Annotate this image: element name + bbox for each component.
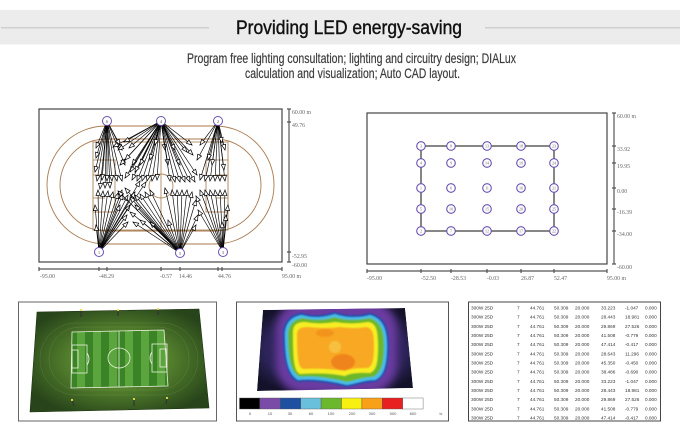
table rows: 300W 25D bbox=[471, 379, 494, 384]
table rows: 7 bbox=[517, 351, 520, 356]
grid outline bbox=[421, 146, 554, 231]
table rows: 50.309 bbox=[554, 351, 569, 356]
luminaire numbers: 11 bbox=[485, 186, 489, 190]
table rows: 0.000 bbox=[645, 388, 657, 393]
subtitle text: Program free lighting consultation; lighting and circuitry design; DIALux bbox=[187, 50, 516, 66]
table rows: 44.761 bbox=[530, 406, 545, 411]
track lines bbox=[40, 323, 198, 395]
table rows: 33.223 bbox=[601, 379, 616, 384]
table rows: 300W 25D bbox=[471, 306, 494, 310]
table rows: 50.309 bbox=[554, 397, 569, 402]
pole numbers: 5 bbox=[179, 251, 182, 256]
legend labels: 200 bbox=[349, 411, 356, 416]
table rows: 45.350 bbox=[601, 360, 616, 366]
luminaire numbers: 20 bbox=[519, 206, 523, 212]
table rows: 44.761 bbox=[530, 333, 545, 338]
table rows: 20.000 bbox=[575, 333, 590, 338]
panel: false-colour illuminance map bbox=[236, 300, 448, 421]
table rows: 50.309 bbox=[554, 370, 569, 375]
table rows: 20.000 bbox=[575, 397, 590, 402]
table rows: -0.417 bbox=[625, 342, 639, 347]
table rows: 47.414 bbox=[601, 416, 616, 420]
table rows: 0.000 bbox=[645, 360, 657, 366]
axis labels: -52.95 bbox=[292, 254, 307, 260]
table rows: 44.761 bbox=[530, 416, 545, 420]
table rows: 44.761 bbox=[530, 397, 545, 402]
axes bbox=[39, 109, 291, 271]
axis labels: -0.03 bbox=[487, 276, 499, 282]
table rows: 20.000 bbox=[575, 306, 590, 310]
table rows: 44.761 bbox=[530, 379, 545, 384]
luminaire numbers: 12 bbox=[485, 228, 489, 234]
table rows: 29.869 bbox=[601, 397, 616, 402]
table rows: 7 bbox=[517, 388, 520, 393]
axis labels: 95.00 m bbox=[282, 274, 301, 280]
axis labels: -0.57 bbox=[160, 274, 172, 280]
table rows: 0.000 bbox=[645, 379, 657, 384]
axis labels bbox=[40, 110, 311, 280]
luminaire numbers: 16 bbox=[519, 186, 523, 190]
table rows: 50.309 bbox=[554, 306, 569, 310]
subtitle text bbox=[187, 50, 516, 81]
table rows: 18.981 bbox=[625, 388, 640, 393]
table rows: 0.000 bbox=[645, 397, 657, 402]
pole markers bbox=[94, 116, 228, 258]
table rows: 44.761 bbox=[530, 342, 545, 347]
luminaire numbers: 14 bbox=[485, 160, 489, 166]
table rows: 20.000 bbox=[575, 315, 590, 320]
table rows: 0.000 bbox=[645, 406, 657, 411]
table rows: 7 bbox=[517, 360, 520, 366]
table rows: -0.779 bbox=[625, 406, 639, 411]
title: Providing LED energy-saving bbox=[236, 18, 462, 39]
table rows: 44.761 bbox=[530, 388, 545, 393]
table rows: 300W 25D bbox=[471, 315, 494, 320]
table rows: 300W 25D bbox=[471, 397, 494, 402]
luminaire numbers: 25 bbox=[552, 206, 556, 212]
axis labels: 44.76 bbox=[218, 274, 231, 280]
axis labels: -60.00 bbox=[617, 265, 632, 271]
axes bbox=[367, 113, 616, 273]
legend labels: 300 bbox=[369, 411, 376, 416]
pitch markings bbox=[71, 330, 168, 388]
table rows: 50.309 bbox=[554, 416, 569, 420]
pole numbers: 2 bbox=[217, 119, 219, 124]
luminaire numbers: 18 bbox=[519, 144, 523, 148]
table rows: 0.000 bbox=[645, 306, 657, 310]
table rows: 50.309 bbox=[554, 342, 569, 347]
table rows: 7 bbox=[517, 397, 520, 402]
table rows: 7 bbox=[517, 416, 520, 420]
floodlight poles bbox=[72, 309, 167, 406]
pole numbers bbox=[98, 119, 225, 256]
axis labels: 0.00 bbox=[617, 189, 627, 195]
axis labels: -16.39 bbox=[617, 210, 632, 216]
table rows: 44.761 bbox=[530, 315, 545, 320]
axis labels: -95.00 bbox=[40, 274, 55, 280]
table rows: 20.000 bbox=[575, 351, 590, 356]
table rows: 20.000 bbox=[575, 416, 590, 420]
legend labels: 60 bbox=[309, 411, 314, 416]
table rows: 7 bbox=[517, 370, 520, 375]
luminaire numbers: 7 bbox=[450, 228, 452, 234]
table rows: 20.000 bbox=[575, 388, 590, 393]
axis labels: 52.47 bbox=[554, 276, 567, 282]
table rows: -1.047 bbox=[625, 306, 639, 310]
table rows: 38.486 bbox=[601, 370, 616, 375]
title bar bbox=[0, 10, 680, 44]
table rows: 33.223 bbox=[601, 306, 616, 310]
luminaire numbers: 4 bbox=[420, 160, 422, 166]
legend labels: lx bbox=[440, 411, 442, 416]
axis labels: 33.92 bbox=[617, 147, 630, 153]
table rows: -0.690 bbox=[625, 370, 639, 375]
table rows: 300W 25D bbox=[471, 360, 494, 366]
table rows: 44.761 bbox=[530, 306, 545, 310]
table rows: 7 bbox=[517, 315, 520, 320]
axis labels bbox=[367, 114, 636, 282]
table rows: 300W 25D bbox=[471, 324, 494, 329]
luminaire numbers bbox=[420, 144, 556, 234]
axis labels: -48.29 bbox=[99, 274, 114, 280]
table rows: 20.000 bbox=[575, 360, 590, 366]
table rows: 41.508 bbox=[601, 406, 616, 411]
axis labels: 26.87 bbox=[521, 276, 534, 282]
axis labels: -60.00 bbox=[292, 263, 307, 269]
luminaire numbers: 23 bbox=[552, 144, 556, 148]
axis labels: 95.00 m bbox=[607, 276, 626, 282]
table rows: 50.309 bbox=[554, 324, 569, 329]
table rows: 50.309 bbox=[554, 406, 569, 411]
luminaire numbers: 10 bbox=[449, 206, 453, 212]
lit ground surface bbox=[30, 309, 209, 412]
legend labels: 30 bbox=[288, 411, 293, 416]
table rows: 7 bbox=[517, 324, 520, 329]
axis labels: -95.00 bbox=[367, 276, 382, 282]
axis labels: 60.00 m bbox=[617, 114, 636, 120]
table rows bbox=[471, 306, 657, 420]
running track outline bbox=[47, 126, 274, 244]
table rows: 44.761 bbox=[530, 370, 545, 375]
table rows: 300W 25D bbox=[471, 351, 494, 356]
table rows: 50.309 bbox=[554, 333, 569, 338]
panel: luminaire data table bbox=[468, 302, 660, 421]
table rows: -0.450 bbox=[625, 360, 639, 366]
table rows: 41.508 bbox=[601, 333, 616, 338]
axis labels: -34.00 bbox=[617, 232, 632, 238]
axis labels: 14.46 bbox=[179, 274, 192, 280]
legend labels: 800 bbox=[410, 411, 417, 416]
illuminance contours bbox=[257, 308, 413, 391]
table rows: 7 bbox=[517, 379, 520, 384]
table rows: 18.981 bbox=[625, 315, 640, 320]
panel: 3D lit football pitch render bbox=[18, 302, 216, 421]
legend labels bbox=[249, 411, 442, 416]
pole numbers: 3 bbox=[222, 250, 225, 255]
table rows: 20.000 bbox=[575, 379, 590, 384]
pole numbers: 1 bbox=[98, 250, 100, 255]
table rows: 50.309 bbox=[554, 315, 569, 320]
legend labels: 500 bbox=[390, 411, 397, 416]
table rows: 0.000 bbox=[645, 315, 657, 320]
table rows: 47.414 bbox=[601, 342, 616, 347]
table rows: 44.761 bbox=[530, 324, 545, 329]
axis labels: -52.50 bbox=[421, 276, 436, 282]
table rows: 7 bbox=[517, 406, 520, 411]
table rows: -0.779 bbox=[625, 333, 639, 338]
luminaire numbers: 9 bbox=[450, 160, 452, 166]
luminaire numbers: 13 bbox=[485, 144, 489, 148]
table rows: 0.000 bbox=[645, 324, 657, 329]
table rows: 7 bbox=[517, 333, 520, 338]
legend labels: 10 bbox=[268, 411, 273, 416]
table rows: 0.000 bbox=[645, 342, 657, 347]
table rows: 44.761 bbox=[530, 351, 545, 356]
axis labels: 60.00 m bbox=[292, 110, 311, 116]
aiming lines bbox=[95, 121, 228, 253]
luminaire numbers: 3 bbox=[420, 144, 422, 148]
panel: luminaire position grid bbox=[367, 113, 636, 282]
table rows: 28.443 bbox=[601, 388, 616, 393]
panel: luminaire aiming diagram bbox=[39, 109, 311, 280]
luminaire numbers: 22 bbox=[552, 228, 556, 234]
legend labels: 0 bbox=[249, 411, 252, 416]
table rows: 300W 25D bbox=[471, 388, 494, 393]
luminaire numbers: 2 bbox=[420, 228, 422, 234]
table rows: 50.309 bbox=[554, 379, 569, 384]
floodlight lamps bbox=[71, 308, 168, 401]
luminaire numbers: 5 bbox=[420, 206, 422, 212]
football pitch outline bbox=[93, 142, 228, 230]
table rows: -1.047 bbox=[625, 379, 639, 384]
striped pitch bbox=[70, 330, 168, 388]
luminaire numbers: 24 bbox=[552, 160, 556, 166]
table rows: 0.000 bbox=[645, 370, 657, 375]
table rows: 300W 25D bbox=[471, 406, 494, 411]
luminaire numbers: 8 bbox=[450, 144, 452, 148]
table rows: 300W 25D bbox=[471, 333, 494, 338]
table rows: 20.000 bbox=[575, 342, 590, 347]
table rows: 28.643 bbox=[601, 351, 616, 356]
table rows: 0.000 bbox=[645, 333, 657, 338]
table rows: 7 bbox=[517, 306, 520, 310]
legend labels: 100 bbox=[328, 411, 335, 416]
axis labels: 19.95 bbox=[617, 164, 630, 170]
table rows: 300W 25D bbox=[471, 416, 494, 420]
luminaire numbers: 19 bbox=[519, 160, 523, 166]
table rows: 20.000 bbox=[575, 324, 590, 329]
table rows: 0.000 bbox=[645, 351, 657, 356]
axis labels: -28.53 bbox=[451, 276, 466, 282]
table rows: 7 bbox=[517, 342, 520, 347]
table rows: 50.309 bbox=[554, 360, 569, 366]
luminaire numbers: 21 bbox=[552, 186, 556, 190]
colour legend bbox=[240, 398, 423, 409]
luminaire circles bbox=[417, 142, 558, 235]
pole numbers: 4 bbox=[160, 119, 163, 124]
table rows: 50.309 bbox=[554, 388, 569, 393]
table rows: 0.000 bbox=[645, 416, 657, 420]
pole numbers: 6 bbox=[106, 119, 109, 124]
table rows: -0.417 bbox=[625, 416, 639, 420]
table rows: 11.296 bbox=[625, 351, 639, 356]
table rows: 27.526 bbox=[625, 324, 640, 329]
table rows: 29.869 bbox=[601, 324, 616, 329]
table rows: 300W 25D bbox=[471, 370, 494, 375]
table rows: 28.443 bbox=[601, 315, 616, 320]
luminaire numbers: 6 bbox=[450, 186, 452, 190]
table rows: 20.000 bbox=[575, 370, 590, 375]
subtitle text: calculation and visualization; Auto CAD layout. bbox=[245, 65, 460, 81]
table rows: 44.761 bbox=[530, 360, 545, 366]
luminaire numbers: 17 bbox=[519, 228, 523, 234]
axis labels: 49.76 bbox=[292, 123, 305, 129]
table rows: 20.000 bbox=[575, 406, 590, 411]
luminaire numbers: 1 bbox=[420, 186, 422, 190]
table rows: 300W 25D bbox=[471, 342, 494, 347]
luminaire numbers: 15 bbox=[485, 206, 489, 212]
table rows: 27.526 bbox=[625, 397, 640, 402]
